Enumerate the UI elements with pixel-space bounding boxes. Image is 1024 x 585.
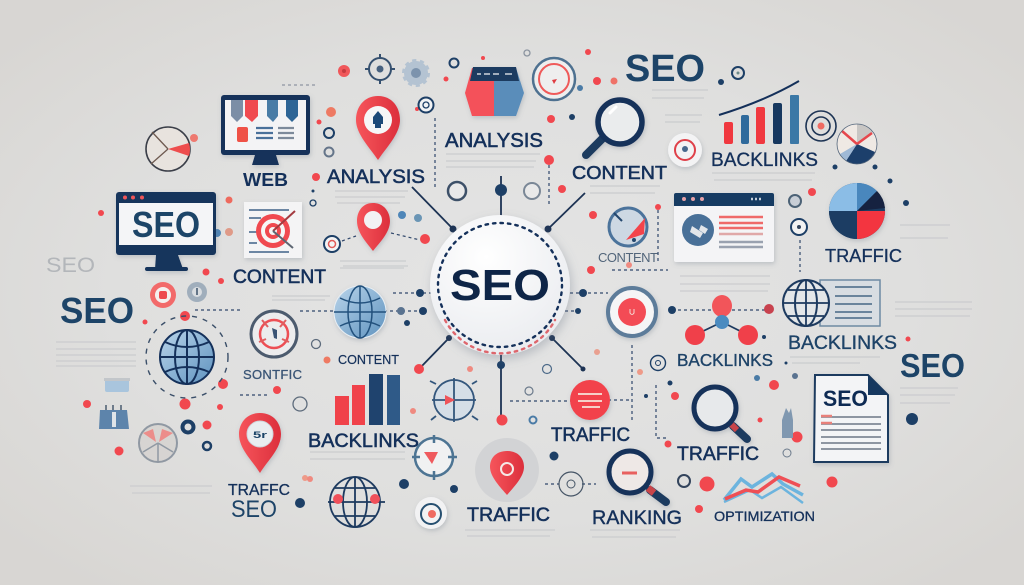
chart: optimization lines <box>724 474 803 503</box>
label: CONTENT compass: CONTENT <box>598 250 658 265</box>
icon: red location blip <box>338 65 350 77</box>
label: BACKLINKS centre: BACKLINKS <box>308 431 419 452</box>
icon: settings ring <box>365 54 395 84</box>
icon: red button <box>570 380 610 420</box>
icon: crosshair lower <box>412 435 457 480</box>
hub: central SEO circle: SEO <box>450 261 550 310</box>
icon: bag <box>99 405 129 429</box>
label: faded SEO: SEO <box>46 254 95 277</box>
hub connector lines <box>412 176 586 415</box>
icon: concentric target <box>806 111 836 141</box>
hub: central SEO circle <box>430 215 570 355</box>
icon: red target badge <box>150 282 176 308</box>
label: OPTIMIZATION: OPTIMIZATION <box>714 508 815 524</box>
panel: browser window <box>674 193 774 262</box>
icon: SEO document: SEO <box>823 386 868 411</box>
label: TRAFFIC right: TRAFFIC <box>677 444 759 465</box>
icon: molecule <box>685 295 758 345</box>
label: CONTENT left: CONTENT <box>233 267 326 288</box>
label: SEO right: SEO <box>900 347 965 384</box>
icon: SEO document <box>814 375 888 462</box>
red dots <box>83 49 910 513</box>
icon: red target right of hub <box>608 288 656 336</box>
icon: grey badge <box>187 282 207 302</box>
icon: compass content <box>609 208 647 246</box>
icon: globe with red nodes <box>328 477 385 527</box>
icon: pie small right <box>837 124 877 164</box>
icon: magnifier ranking <box>609 451 666 502</box>
small ring icons <box>182 50 807 496</box>
label: ANALYSIS centre: ANALYSIS <box>445 130 543 152</box>
icon: red pin traffic left <box>239 413 281 473</box>
icon: red pin small <box>357 203 390 251</box>
bar chart: centre <box>335 374 400 425</box>
bar chart: backlinks top right <box>719 81 799 144</box>
icon: red target ring <box>533 58 575 100</box>
icon: gear <box>404 61 428 85</box>
icon: monitor SEO <box>116 192 216 271</box>
icon: magnifier traffic <box>694 387 747 439</box>
label: TRAFFIC centre: TRAFFIC <box>551 425 630 446</box>
icon: monitor SEO: SEO <box>132 204 200 245</box>
icon: big pin traffic <box>475 438 539 502</box>
label: BACKLINKS right: BACKLINKS <box>788 333 897 354</box>
label: SEO left: SEO <box>60 290 134 331</box>
icon: target document <box>244 202 302 258</box>
label: CONTENT top: CONTENT <box>572 163 667 183</box>
label: SEO pin: SEO <box>231 496 277 523</box>
icon: monitor with storefront <box>221 95 310 165</box>
label: BACKLINKS top right: BACKLINKS <box>711 150 818 171</box>
icon: basket <box>104 378 130 392</box>
label: WEB: WEB <box>243 170 288 190</box>
label: TRAFFIC top right: TRAFFIC <box>825 246 902 266</box>
chart: big pie <box>829 183 885 239</box>
icon: magnifier top <box>586 100 642 155</box>
icon: red pin analysis <box>356 96 400 160</box>
icon: globe centre left <box>334 286 386 338</box>
icon: red pin traffic left: 5r <box>253 430 268 440</box>
icon: white badge <box>415 497 447 529</box>
icon: crosshair right <box>430 378 478 422</box>
icon: pie outline left <box>146 127 190 171</box>
navy dots <box>213 79 918 508</box>
icon: small chart <box>782 408 793 438</box>
label: CONTENT small: CONTENT <box>338 353 399 367</box>
label: ANALYSIS left: ANALYSIS <box>327 167 425 188</box>
label: TRAFFC: TRAFFC <box>228 482 290 499</box>
icon: white red target <box>668 133 702 167</box>
dashed connectors <box>195 118 800 484</box>
placeholder caption lines <box>56 85 972 537</box>
label: TRAFFIC bottom centre: TRAFFIC <box>467 505 550 526</box>
icon: faded pie <box>139 424 177 462</box>
label: RANKING: RANKING <box>592 508 682 529</box>
icon: globe and document <box>783 280 880 326</box>
label: SONTFIC: SONTFIC <box>243 367 302 382</box>
label: BACKLINKS molecule: BACKLINKS <box>677 350 773 370</box>
icon: hexagon split <box>465 67 524 116</box>
icon: globe in dashed orbit <box>146 316 228 398</box>
label: SEO top: SEO <box>625 48 705 90</box>
icon: crosshair target left <box>251 311 297 357</box>
